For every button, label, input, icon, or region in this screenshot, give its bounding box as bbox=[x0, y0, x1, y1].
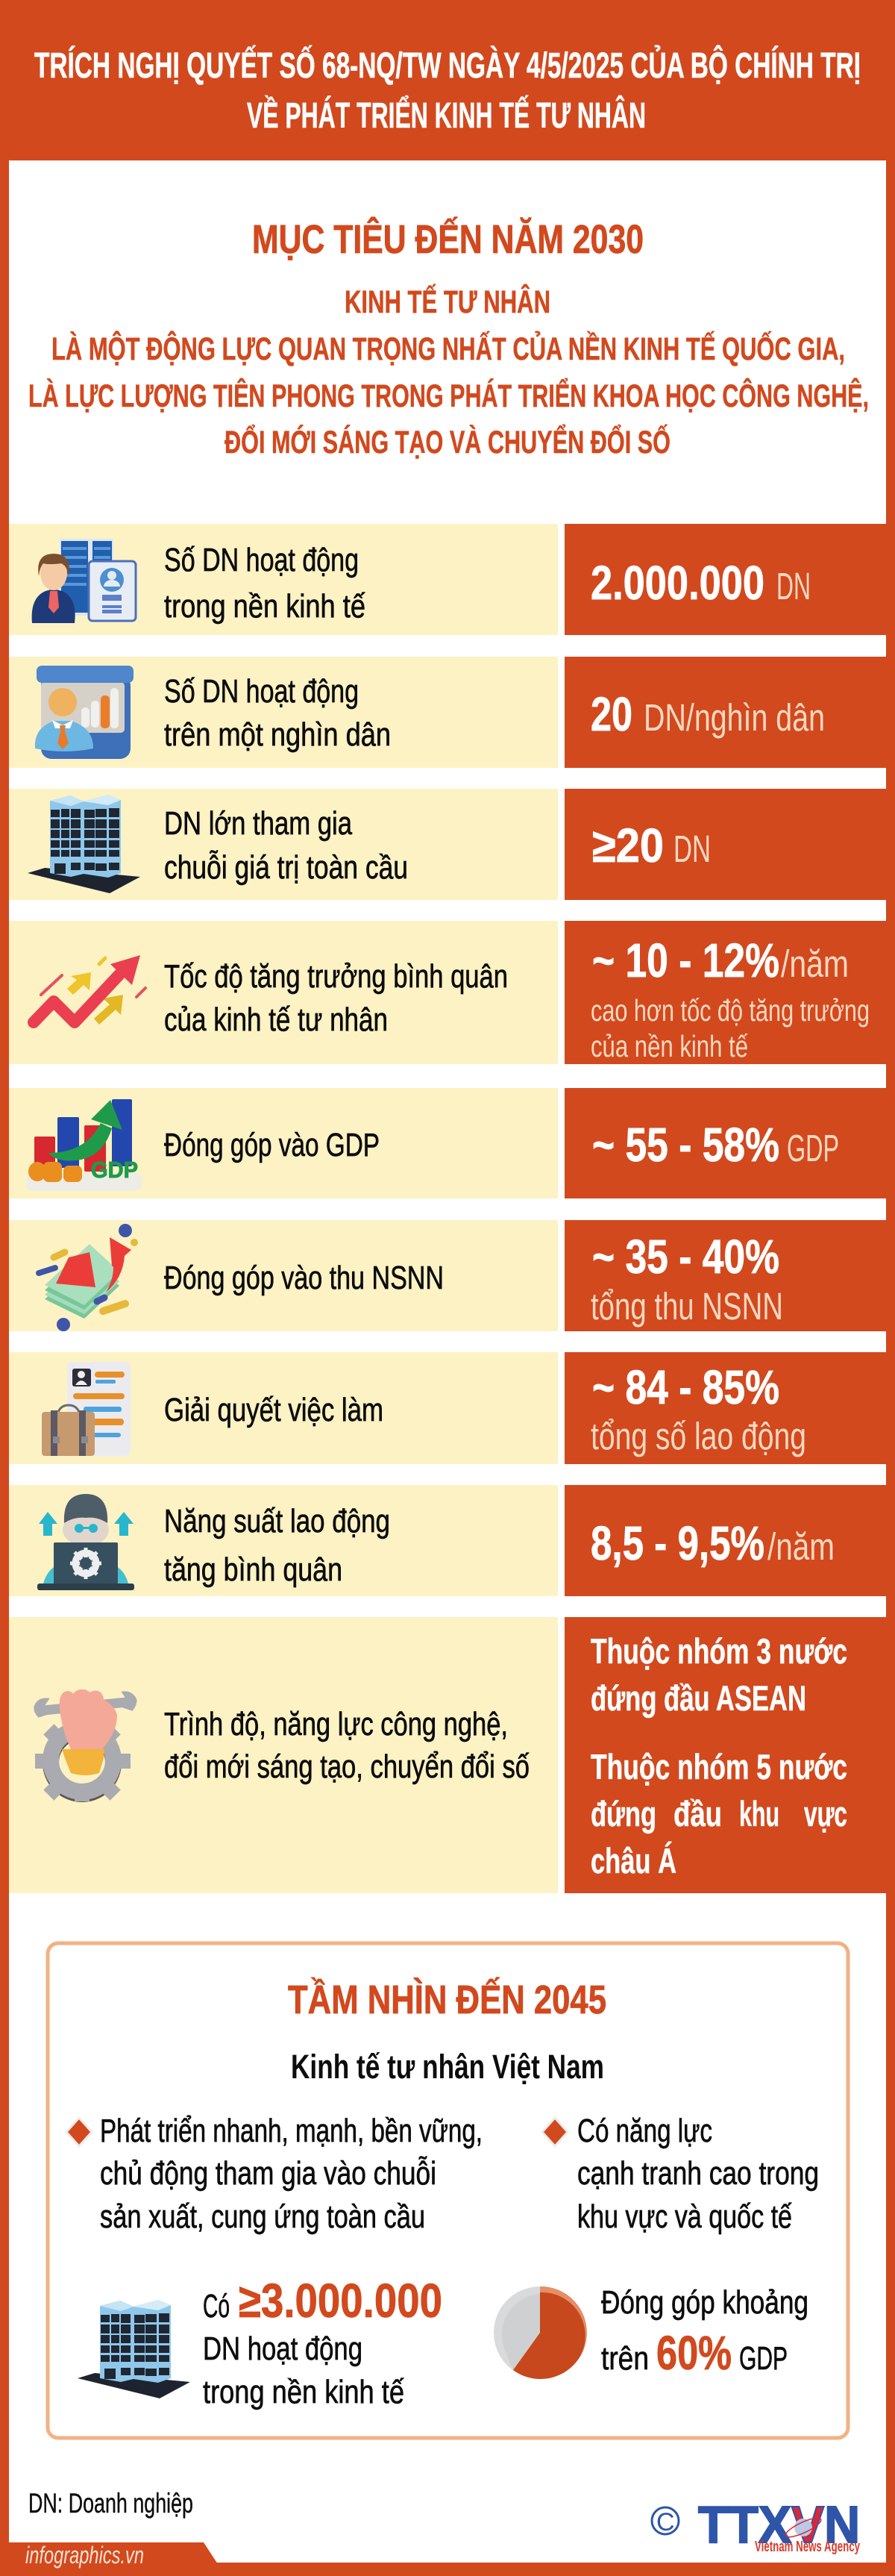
row: number of enterprises bbox=[9, 524, 886, 635]
label: Số DN hoạt động bbox=[164, 542, 359, 578]
value: 2.000.000 bbox=[591, 556, 764, 610]
value: đứng bbox=[591, 1794, 656, 1833]
label bbox=[164, 958, 508, 1038]
stat: 3 million enterprises: DN hoạt động bbox=[203, 2330, 362, 2367]
value: tổng số lao động bbox=[591, 1415, 806, 1457]
icon: office building bbox=[28, 795, 140, 893]
value: ~ 84 - 85% bbox=[592, 1360, 779, 1414]
stat: 60 percent of GDP: 60% bbox=[656, 2326, 732, 2380]
goal statement: KINH TẾ TƯ NHÂN bbox=[345, 284, 550, 320]
stat: 3 million enterprises: ≥3.000.000 bbox=[239, 2274, 442, 2328]
value bbox=[591, 1230, 783, 1328]
bullet: development bbox=[66, 2113, 483, 2235]
label: của kinh tế tư nhân bbox=[164, 1001, 388, 1038]
title bbox=[34, 45, 861, 136]
heading: vision to 2045: TẦM NHÌN ĐẾN 2045 bbox=[288, 1978, 606, 2022]
label: trong nền kinh tế bbox=[164, 588, 365, 625]
value: 8,5 - 9,5% bbox=[591, 1516, 764, 1570]
bullet: development: chủ động tham gia vào chuỗi bbox=[100, 2155, 436, 2192]
label: Đóng góp vào thu NSNN bbox=[164, 1260, 444, 1296]
label: Đóng góp vào GDP bbox=[164, 1127, 380, 1163]
value: vực bbox=[804, 1794, 847, 1833]
value bbox=[591, 1631, 847, 1881]
stat: 60 percent of GDP bbox=[601, 2284, 808, 2380]
row: GDP contribution bbox=[9, 1088, 886, 1198]
footnote: DN: Doanh nghiệp bbox=[28, 2488, 193, 2519]
label: Trình độ, năng lực công nghệ, bbox=[164, 1706, 508, 1742]
label: Số DN hoạt động bbox=[164, 673, 359, 710]
pie chart: 60 percent of GDP bbox=[494, 2286, 587, 2379]
row: labour productivity bbox=[9, 1485, 886, 1596]
icon: hand, wrench and gear bbox=[35, 1689, 136, 1801]
label: đổi mới sáng tạo, chuyển đổi số bbox=[164, 1748, 530, 1785]
row: jobs bbox=[9, 1352, 886, 1464]
value: /năm bbox=[767, 1525, 835, 1568]
value bbox=[591, 687, 825, 741]
row: state budget contribution bbox=[9, 1220, 886, 1331]
bullet: competitiveness bbox=[542, 2113, 819, 2235]
value: DN/nghìn dân bbox=[644, 696, 825, 739]
label: Năng suất lao động bbox=[164, 1503, 390, 1539]
icon: money and arrows bbox=[39, 1224, 138, 1331]
icon: worker at laptop bbox=[37, 1494, 134, 1590]
logo: TTXVN: C bbox=[656, 2508, 675, 2536]
icon: GDP chart: GDP bbox=[91, 1157, 138, 1183]
bullet: development: Phát triển nhanh, mạnh, bền vững, bbox=[100, 2113, 483, 2149]
row: enterprises per thousand people bbox=[9, 657, 886, 768]
value bbox=[592, 819, 711, 872]
stat: 3 million enterprises bbox=[203, 2274, 442, 2410]
value: ~ 10 - 12% bbox=[592, 934, 779, 987]
label bbox=[164, 1706, 530, 1785]
value: GDP bbox=[787, 1127, 839, 1169]
icon: GDP chart bbox=[26, 1099, 142, 1191]
logo: TTXVN: TTXVN bbox=[698, 2495, 860, 2554]
row: large enterprises bbox=[9, 789, 886, 900]
label bbox=[164, 542, 365, 625]
goal statement: ĐỔI MỚI SÁNG TẠO VÀ CHUYỂN ĐỔI SỐ bbox=[224, 423, 671, 460]
panel: vision to 2045 bbox=[48, 1943, 848, 2438]
value: 20 bbox=[591, 687, 632, 741]
stat: 60 percent of GDP: Đóng góp khoảng bbox=[601, 2284, 808, 2321]
bullet: competitiveness: khu vực và quốc tế bbox=[577, 2198, 792, 2235]
stat: 3 million enterprises: Có bbox=[203, 2288, 230, 2325]
icon: presenter at board bbox=[35, 666, 134, 759]
source tab: infographics.vn bbox=[25, 2542, 144, 2569]
icon: resume and briefcase bbox=[42, 1362, 131, 1456]
subheading: Kinh tế tư nhân Việt Nam bbox=[291, 2048, 604, 2086]
value: của nền kinh tế bbox=[591, 1029, 748, 1063]
heading: goals to 2030: MỤC TIÊU ĐẾN NĂM 2030 bbox=[252, 216, 644, 262]
stat: 60 percent of GDP: trên bbox=[601, 2340, 649, 2377]
value: ~ 35 - 40% bbox=[592, 1230, 779, 1284]
value: ~ 55 - 58% bbox=[592, 1118, 779, 1172]
label: chuỗi giá trị toàn cầu bbox=[164, 849, 408, 886]
row: technology and innovation bbox=[9, 1617, 886, 1893]
label bbox=[164, 805, 408, 886]
bullet: competitiveness: Có năng lực bbox=[577, 2113, 712, 2149]
label: Tốc độ tăng trưởng bình quân bbox=[164, 958, 508, 995]
stat: 60 percent of GDP: GDP bbox=[739, 2340, 788, 2377]
value: đứng đầu ASEAN bbox=[591, 1678, 806, 1718]
icon: business person with card bbox=[32, 539, 136, 623]
label: trên một nghìn dân bbox=[164, 716, 391, 753]
value: châu Á bbox=[591, 1841, 676, 1881]
row: growth rate bbox=[9, 921, 886, 1064]
label bbox=[164, 673, 391, 753]
value bbox=[591, 1360, 806, 1457]
icon: rising arrows bbox=[34, 955, 145, 1025]
label: Giải quyết việc làm bbox=[164, 1392, 383, 1428]
stat: 3 million enterprises: trong nền kinh tế bbox=[203, 2374, 404, 2410]
label: DN lớn tham gia bbox=[164, 805, 352, 842]
icon: office building bbox=[78, 2300, 190, 2398]
value: khu bbox=[739, 1794, 779, 1833]
label bbox=[164, 1503, 390, 1588]
value: ≥20 bbox=[592, 819, 664, 872]
title: VỀ PHÁT TRIỂN KINH TẾ TƯ NHÂN bbox=[247, 95, 646, 136]
value: DN bbox=[776, 565, 811, 607]
bullet: development: sản xuất, cung ứng toàn cầu bbox=[100, 2198, 425, 2235]
value: /năm bbox=[781, 942, 849, 985]
bullet: competitiveness: cạnh tranh cao trong bbox=[577, 2155, 819, 2192]
value: DN bbox=[673, 828, 711, 870]
label: tăng bình quân bbox=[164, 1551, 342, 1588]
goal statement bbox=[28, 284, 869, 460]
value bbox=[591, 934, 870, 1063]
value: tổng thu NSNN bbox=[591, 1285, 783, 1328]
value: đầu bbox=[673, 1794, 722, 1833]
